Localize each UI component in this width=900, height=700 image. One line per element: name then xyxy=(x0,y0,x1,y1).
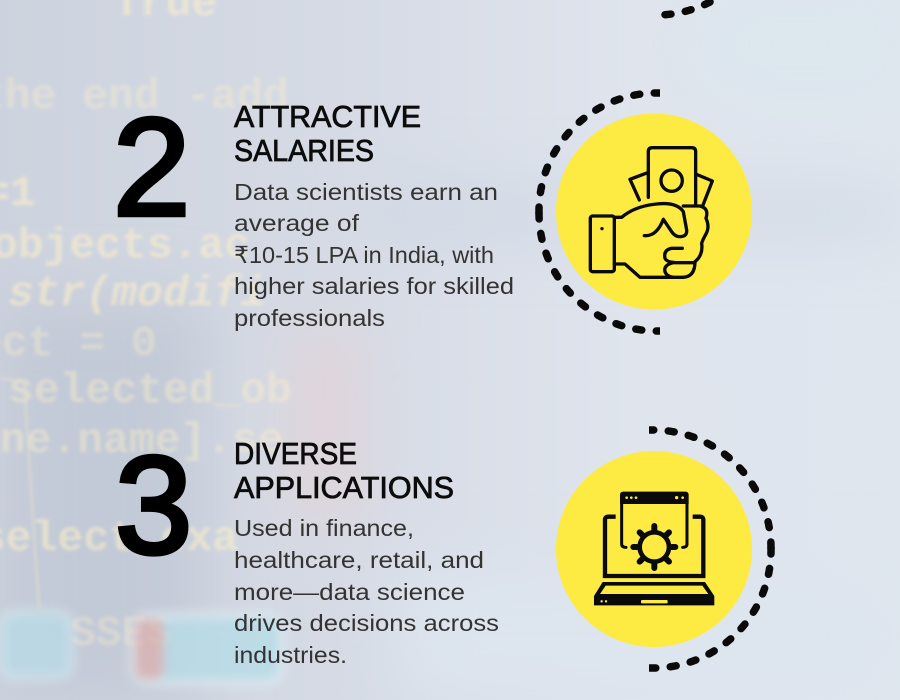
item 2 body text xyxy=(234,179,514,331)
blurred code background: str(modifi xyxy=(8,269,266,318)
item 3 body text: Used in finance, xyxy=(234,515,414,541)
icon: laptop with gear xyxy=(556,430,771,668)
item 3 heading: APPLICATIONS xyxy=(234,470,454,505)
item 3 body text: drives decisions across xyxy=(234,610,499,636)
item 2 body text: professionals xyxy=(234,305,385,331)
item 3 body text xyxy=(234,515,499,668)
item 3 heading: DIVERSE xyxy=(234,436,357,471)
item 3 body text: healthcare, retail, and xyxy=(234,547,484,573)
blurred code background: selected_ob xyxy=(8,366,292,415)
blurred code background: SSES xyxy=(70,609,173,658)
dashed arc right xyxy=(650,430,771,668)
laptop and gear xyxy=(594,492,714,605)
item 2 body text: ₹10-15 LPA in India, with xyxy=(234,242,494,268)
item 2 number: 2 xyxy=(113,90,190,245)
blurred code background xyxy=(0,0,376,700)
item 3 body text: industries. xyxy=(234,642,347,668)
item 2 heading xyxy=(234,99,421,168)
hand and banknotes xyxy=(590,148,712,277)
item 2 heading: SALARIES xyxy=(234,133,374,168)
dashed arc left xyxy=(539,93,660,331)
item 3 heading xyxy=(234,436,454,505)
item 2 body text: average of xyxy=(234,210,360,236)
item 2 body text: higher salaries for skilled xyxy=(234,273,514,299)
icon: hand holding money xyxy=(539,93,752,331)
item 2 body text: Data scientists earn an xyxy=(234,179,498,205)
top dashed arc fragment xyxy=(652,2,710,15)
item 2 heading: ATTRACTIVE xyxy=(234,99,421,134)
item 3 body text: more—data science xyxy=(234,579,465,605)
item 3 number: 3 xyxy=(115,428,192,583)
